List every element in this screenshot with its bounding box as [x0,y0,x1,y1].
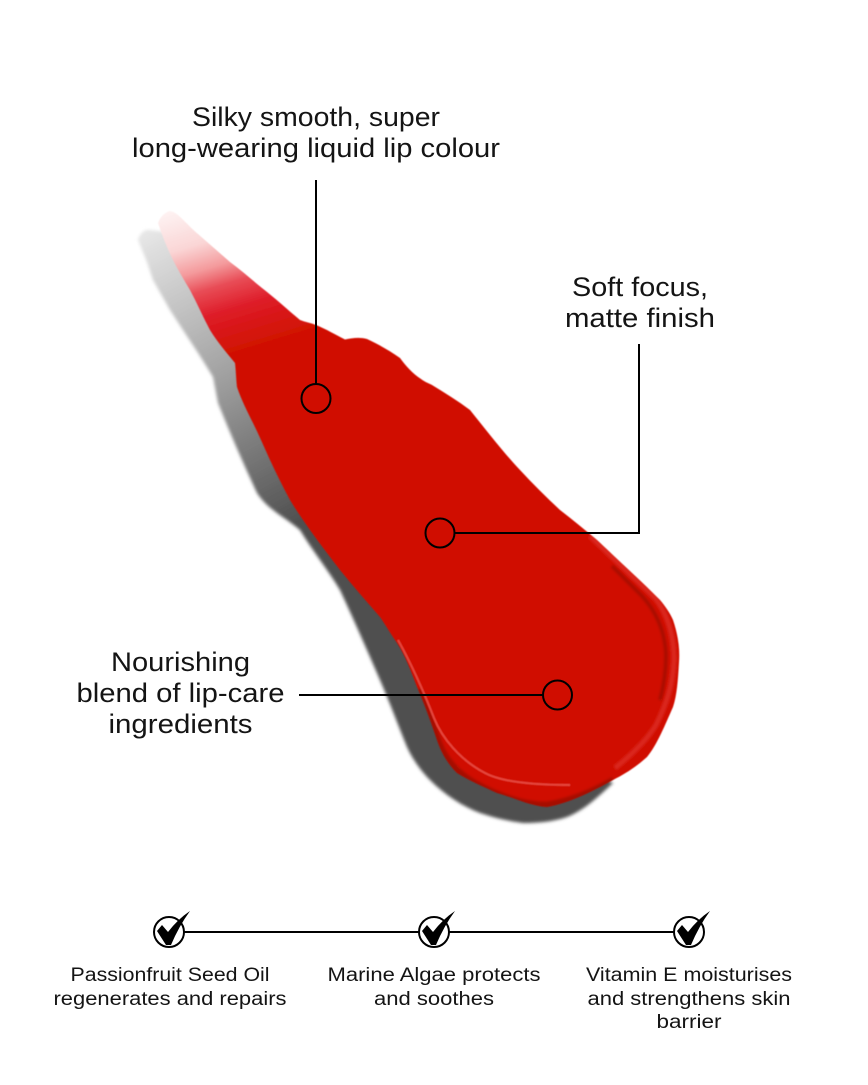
swatch shadow [138,230,613,823]
benefit: marine algae: Marine Algae protects [328,965,540,986]
icon: check [419,911,455,947]
benefit: vitamin e [586,911,792,1033]
infographic canvas [54,106,792,1028]
callout: matte finish: Soft focus, [572,272,708,302]
lipstick swatch [158,211,679,807]
benefit: vitamin e: Vitamin E moisturises [586,965,792,986]
benefit: marine algae [328,911,540,1010]
benefit: vitamin e: and strengthens skin [588,989,790,1010]
benefit: passionfruit seed oil: Passionfruit Seed Oil [70,965,270,986]
callout: matte finish: matte finish [565,303,715,333]
callout: silky smooth [132,102,500,413]
callout: silky smooth: long-wearing liquid lip colour [132,133,500,163]
callout: nourishing blend [76,647,572,739]
icon: check [154,911,190,947]
callout: silky smooth: Silky smooth, super [192,102,440,132]
swatch rim highlights [398,640,570,785]
benefit: marine algae: and soothes [374,989,494,1010]
callout: nourishing blend: Nourishing [111,647,250,677]
icon: check [674,911,710,947]
callout: matte finish [426,272,715,548]
callout: nourishing blend: ingredients [108,709,252,739]
benefits connector line [184,931,674,933]
callout: nourishing blend: blend of lip-care [76,678,284,708]
benefit: passionfruit seed oil [54,911,286,1010]
swatch rim shading [417,690,614,806]
benefit: vitamin e: barrier [656,1012,722,1033]
benefit: passionfruit seed oil: regenerates and repairs [54,989,286,1010]
